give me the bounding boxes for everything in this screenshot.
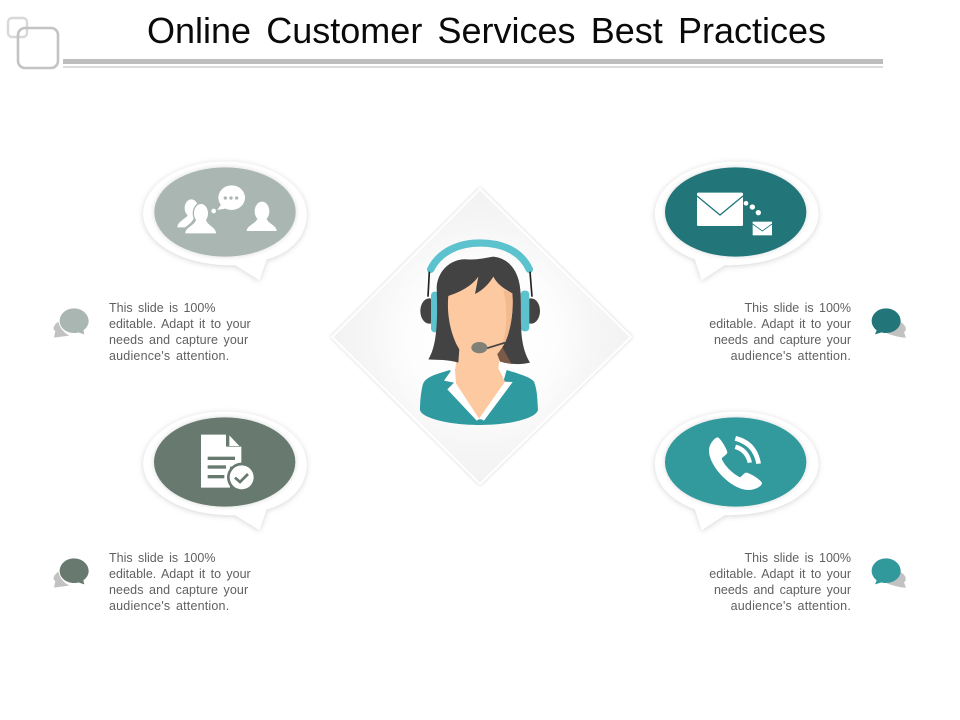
- headset wires: [428, 272, 532, 297]
- collar: [444, 367, 513, 421]
- text: bottom right: This slide is 100%: [745, 551, 851, 565]
- face: [448, 277, 513, 364]
- face shade: [502, 290, 513, 348]
- panel: top left bubble: [143, 162, 307, 280]
- brown hair shadow: [497, 346, 512, 364]
- icon: people with speech bubble: [177, 185, 277, 233]
- text: top right: needs and capture your: [714, 333, 851, 347]
- bubble fill: [154, 167, 296, 257]
- text: top right: This slide is 100%: [745, 301, 851, 315]
- text: bottom right: needs and capture your: [714, 583, 851, 597]
- text: top right: audience's attention.: [731, 349, 851, 363]
- jacket: [420, 370, 538, 425]
- text: top left: audience's attention.: [109, 349, 229, 363]
- text: bottom left: editable. Adapt it to your: [109, 567, 251, 581]
- text: bottom right: editable. Adapt it to your: [709, 567, 851, 581]
- icon: envelopes: [697, 193, 772, 235]
- bubble fill: [665, 167, 806, 257]
- ear cups: [420, 291, 540, 332]
- bubble fill: [154, 417, 295, 507]
- panel: bottom right bubble: [655, 412, 818, 530]
- bubble outline: [143, 162, 307, 280]
- panel: bottom left bubble: [143, 412, 307, 530]
- panel: top right bubble: [655, 162, 818, 280]
- icon: phone with signal: [709, 436, 762, 490]
- text: bottom left: needs and capture your: [109, 583, 248, 597]
- bubble outline: [655, 412, 818, 530]
- icon: small chat bottom left: [54, 558, 89, 588]
- text: top left: This slide is 100%: [109, 301, 215, 315]
- bubble outline: [655, 162, 818, 280]
- panel: central diamond: [332, 189, 631, 484]
- icon: small chat bottom right: [872, 558, 906, 588]
- bubble fill: [665, 417, 806, 507]
- text: bottom left: This slide is 100%: [109, 551, 215, 565]
- icon: small chat top right: [872, 308, 906, 338]
- text: top left: needs and capture your: [109, 333, 248, 347]
- text: bottom right: audience's attention.: [731, 599, 851, 613]
- headset band: [431, 243, 529, 269]
- icon: document with check: [201, 435, 256, 492]
- title: Online Customer Services Best Practices: [147, 10, 826, 51]
- microphone: [471, 342, 505, 353]
- bubble outline: [143, 412, 307, 530]
- text: top right: editable. Adapt it to your: [709, 317, 851, 331]
- text: top left: editable. Adapt it to your: [109, 317, 251, 331]
- logo: overlapping rounded squares: [8, 18, 58, 68]
- icon: small chat top left: [54, 308, 89, 338]
- icon: customer service agent with headset: [420, 243, 540, 425]
- text: bottom left: audience's attention.: [109, 599, 229, 613]
- hair: [428, 257, 530, 364]
- title underline: [63, 59, 883, 68]
- neck and chest: [455, 350, 505, 419]
